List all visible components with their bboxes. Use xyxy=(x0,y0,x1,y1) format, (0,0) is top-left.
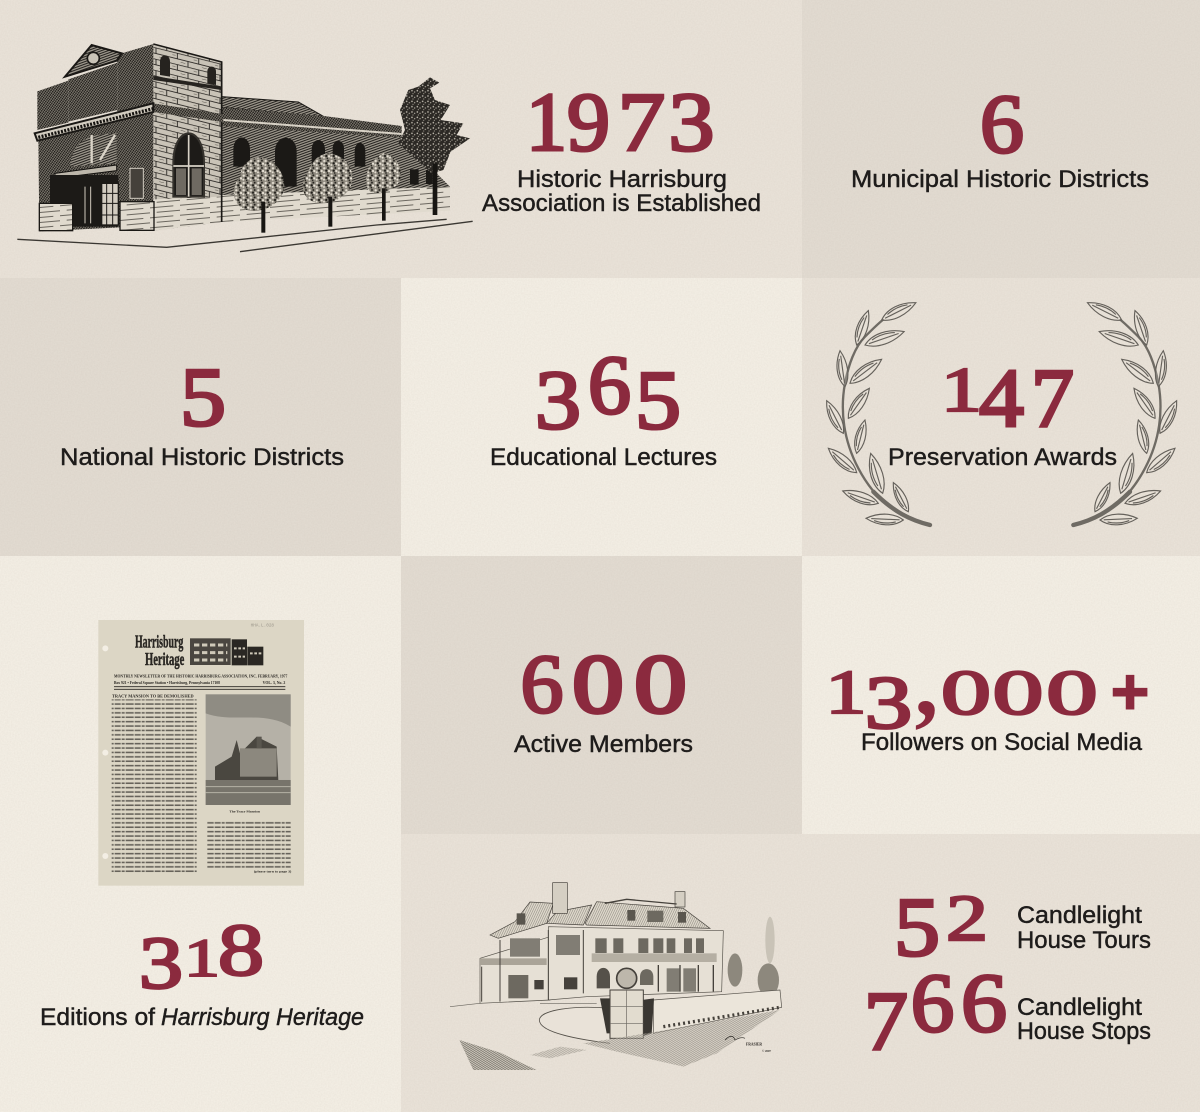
chimneys xyxy=(553,883,685,913)
label: Active Members: Active Members xyxy=(514,731,693,758)
stat: 147: 7 xyxy=(1031,352,1074,445)
tall tree xyxy=(398,77,470,215)
paper sheet xyxy=(98,620,304,886)
cornice left xyxy=(35,103,153,141)
illustration: Harrisburg Heritage newsletter xyxy=(98,620,304,886)
artist signature: FRASIER xyxy=(746,1042,762,1046)
artist signature xyxy=(725,1036,771,1053)
stat: 147: 1 xyxy=(941,354,982,425)
article body text xyxy=(112,699,291,873)
entry pillar with urn xyxy=(610,968,643,1038)
illustration: mansion drawing xyxy=(450,883,782,1070)
stat: 13,000+ xyxy=(826,630,1149,745)
arched window xyxy=(173,133,204,197)
right wing walls xyxy=(222,124,450,222)
left wing wall xyxy=(480,937,550,1003)
ground lines xyxy=(17,219,473,252)
illustration: Historic Harrisburg Association building xyxy=(17,44,473,252)
article photo xyxy=(206,694,291,805)
label: Historic Harrisburg Association is Established xyxy=(482,166,761,217)
tower right face with brick xyxy=(153,44,222,231)
label: Candlelight House Tours: House Tours xyxy=(1017,927,1151,954)
stat: 13,000+: 0 xyxy=(993,658,1043,728)
masthead rowhouses xyxy=(190,638,263,665)
stat: 318: 1 xyxy=(184,928,220,988)
label: Historic Harrisburg Association is Established: Historic Harrisburg xyxy=(517,166,727,193)
masthead title: Heritage xyxy=(145,649,184,669)
label: Candlelight House Stops: House Stops xyxy=(1017,1018,1151,1045)
label: Preservation Awards: Preservation Awards xyxy=(888,444,1117,471)
stat: 6: 6 xyxy=(980,77,1024,171)
foreground driveway shading xyxy=(459,1010,780,1070)
stat: 13,000+: 3 xyxy=(865,661,912,745)
stat: 600: 0 xyxy=(572,638,624,731)
stat: 365: 6 xyxy=(588,339,631,432)
label: Municipal Historic Districts: Municipal Historic Districts xyxy=(851,166,1149,193)
stat: 52: 2 xyxy=(946,882,988,955)
masthead title: Harrisburg xyxy=(135,631,183,651)
stat: 318 xyxy=(139,910,264,1004)
stat: 13,000+: + xyxy=(1111,656,1149,729)
archive stamp: HHA.L.028 xyxy=(251,624,274,629)
left facade upper xyxy=(37,81,68,130)
hole punches xyxy=(102,645,108,859)
stat: 365: 3 xyxy=(535,355,581,447)
page turn note: (please turn to page 3) xyxy=(254,870,291,874)
stat: 1973: 9 xyxy=(567,76,610,169)
artist signature: © 2007 xyxy=(762,1048,771,1053)
label: Candlelight House Tours xyxy=(1017,902,1151,954)
label: Followers on Social Media: Followers on Social Media xyxy=(861,729,1143,756)
label: Editions of Harrisburg Heritage: Editions of xyxy=(40,1004,155,1031)
pediment xyxy=(65,45,122,77)
newsletter header lines xyxy=(114,674,287,689)
stat: 13,000+: 0 xyxy=(941,658,991,728)
upper windows xyxy=(595,938,704,953)
stat: 1973: 7 xyxy=(618,76,665,169)
newsletter header lines: VOL. 3, No. 2 xyxy=(263,680,285,685)
background shrubs xyxy=(728,917,779,997)
newsletter header lines: MONTHLY NEWSLETTER OF THE HISTORIC HARRISBURG ASSOCIATION, INC. FEBRUARY, 1977 xyxy=(114,674,287,679)
left facade lower xyxy=(38,107,153,231)
stone wall with hedge xyxy=(600,990,782,1037)
article headline: TRACY MANSION TO BE DEMOLISHED xyxy=(112,693,194,698)
stat: 147 xyxy=(941,351,1074,445)
stat: 766 xyxy=(864,957,1007,1068)
stat: 52 xyxy=(894,882,988,974)
label: Historic Harrisburg Association is Established: Association is Established xyxy=(482,190,761,217)
icon: laurel wreath xyxy=(822,298,1182,526)
garden lawn oval xyxy=(539,1007,610,1043)
stat: 5: 5 xyxy=(180,352,226,444)
entry canopy and door xyxy=(55,165,117,178)
front arched window xyxy=(70,133,117,167)
stat: 365: 5 xyxy=(635,355,681,447)
balcony and arcade xyxy=(592,953,717,992)
label: Candlelight House Tours: Candlelight xyxy=(1017,902,1142,929)
stat: 766: 6 xyxy=(911,957,954,1050)
porch xyxy=(480,930,583,1002)
cornice on tower right xyxy=(153,103,223,122)
right wing roof xyxy=(222,97,324,117)
stat: 600: 0 xyxy=(634,637,687,731)
stat: 147: 4 xyxy=(979,351,1024,444)
newsletter header lines: Box 921 • Federal Square Station • Harrisburg, Pennsylvania 17108 xyxy=(114,680,220,685)
stat: 766: 7 xyxy=(864,974,908,1068)
stat: 318: 3 xyxy=(139,922,183,1004)
right wing arched windows xyxy=(233,137,433,187)
dormers xyxy=(517,899,686,925)
masthead title xyxy=(135,631,184,669)
label: National Historic Districts: National Historic Districts xyxy=(60,444,344,471)
label: Editions of Harrisburg Heritage: Harrisburg Heritage xyxy=(161,1004,364,1031)
street trees xyxy=(234,153,401,233)
stat: 1973 xyxy=(526,75,715,169)
stat: 1973: 3 xyxy=(668,77,715,169)
tower small windows xyxy=(160,55,170,77)
ground sketch lines xyxy=(450,1003,597,1007)
stat: 13,000+: , xyxy=(915,630,938,736)
label: Educational Lectures: Educational Lectures xyxy=(490,444,717,471)
stat: 13,000+: 1 xyxy=(826,658,866,727)
roofs xyxy=(490,902,710,938)
label: Editions of Harrisburg Heritage xyxy=(40,1004,364,1031)
stone bases xyxy=(39,203,73,231)
stat: 600 xyxy=(521,637,687,731)
label: Candlelight House Stops xyxy=(1017,994,1151,1045)
stat: 13,000+: 0 xyxy=(1046,657,1098,728)
photo caption: The Tracy Mansion xyxy=(229,810,260,814)
label: Candlelight House Stops: Candlelight xyxy=(1017,994,1142,1021)
stat: 766: 6 xyxy=(961,958,1007,1050)
stat: 600: 6 xyxy=(521,638,563,731)
stat: 1973: 1 xyxy=(526,75,567,168)
right wing frieze xyxy=(222,107,402,137)
stat: 318: 8 xyxy=(218,910,264,992)
stat: 365 xyxy=(535,339,681,447)
main facade wall xyxy=(548,927,723,1000)
stat: 52: 5 xyxy=(894,882,940,974)
